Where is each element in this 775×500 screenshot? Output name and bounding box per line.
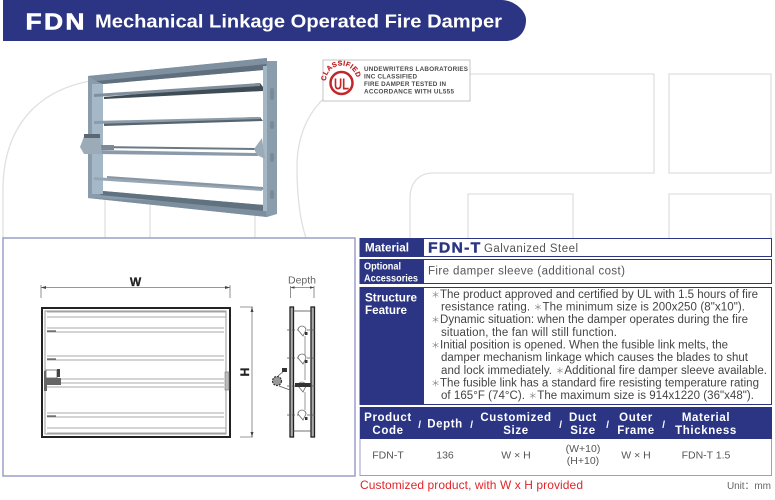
structure label bbox=[365, 292, 417, 317]
icon: UL classified logo bbox=[321, 60, 360, 96]
feature list: of 165°F (74°C). ＊The maximum size is 914x1220 (36"x48"). bbox=[441, 390, 754, 402]
accessories text: Fire damper sleeve (additional cost) bbox=[428, 266, 625, 278]
unit note: Unit：mm bbox=[727, 481, 771, 492]
feature list: ＊The product approved and certified by UL with 1.5 hours of fire bbox=[431, 289, 758, 301]
front view drawing bbox=[42, 308, 230, 437]
panel: optional accessories row bbox=[360, 260, 772, 284]
table header: / bbox=[606, 420, 610, 431]
H dimension bbox=[238, 307, 254, 437]
accessories label: Optional bbox=[364, 262, 401, 272]
table header: Size bbox=[503, 425, 529, 437]
material label: Material bbox=[365, 240, 409, 254]
table data row: FDN-T bbox=[372, 450, 404, 462]
feature list: resistance rating. ＊The minimum size is 200x250 (8"x10"). bbox=[441, 302, 745, 314]
left mechanism bbox=[44, 369, 61, 391]
table header: Product bbox=[364, 412, 412, 424]
panel: technical drawings bbox=[3, 238, 355, 476]
table data row: (H+10) bbox=[567, 455, 599, 467]
table header: / bbox=[470, 420, 474, 431]
table header: Material bbox=[682, 412, 730, 424]
UL text block: FIRE DAMPER TESTED IN bbox=[364, 81, 446, 88]
table data row: FDN-T 1.5 bbox=[682, 450, 731, 462]
table data row: (W+10) bbox=[566, 443, 600, 455]
product code heading: FDN bbox=[26, 10, 87, 35]
UL text block bbox=[364, 66, 468, 96]
table header bbox=[364, 412, 737, 437]
W dimension bbox=[41, 275, 230, 298]
depth label and dimension bbox=[288, 274, 316, 298]
customized product note: Customized product, with W x H provided bbox=[360, 478, 583, 492]
accessories label: Accessories bbox=[364, 274, 418, 284]
UL text block: UNDEWRITERS LABORATORIES bbox=[364, 66, 468, 73]
material value: Galvanized Steel bbox=[484, 243, 578, 255]
material value bbox=[428, 240, 578, 256]
table data row: W × H bbox=[621, 450, 651, 462]
table header: / bbox=[662, 420, 666, 431]
panel: material row bbox=[360, 238, 772, 256]
blades bbox=[94, 83, 263, 191]
H dimension: H bbox=[238, 368, 252, 376]
table header: Code bbox=[372, 425, 404, 437]
UL text block: INC CLASSIFIED bbox=[364, 74, 417, 80]
table header: Outer bbox=[619, 412, 653, 424]
table header: / bbox=[418, 420, 422, 431]
table data row bbox=[372, 443, 731, 467]
structure label: Feature bbox=[365, 305, 407, 317]
feature list: ＊The fusible link has a standard fire resisting temperature rating bbox=[431, 378, 759, 390]
panel: structure feature row bbox=[360, 288, 772, 404]
table data row: W × H bbox=[501, 450, 531, 462]
title text: Mechanical Linkage Operated Fire Damper bbox=[95, 10, 502, 32]
icon: UL classified logo: CLASSIFIED bbox=[321, 60, 360, 80]
side mechanism bbox=[272, 368, 290, 390]
feature list: situation, the fan will still function. bbox=[441, 327, 617, 339]
linkage bars bbox=[92, 145, 258, 156]
table header: Depth bbox=[427, 418, 463, 430]
table header: Customized bbox=[480, 412, 552, 424]
feature list: ＊Initial position is opened. When the fusible link melts, the bbox=[431, 340, 728, 352]
left bracket bbox=[80, 134, 102, 154]
feature list: ＊Dynamic situation: when the damper operates during the fire bbox=[431, 314, 748, 326]
material value: FDN-T bbox=[428, 240, 481, 256]
table header: Thickness bbox=[675, 425, 737, 437]
table header: Duct bbox=[569, 412, 597, 424]
depth label and dimension: Depth bbox=[288, 274, 316, 286]
illustration: 3D fire damper bbox=[80, 58, 277, 217]
panel: specification table bbox=[360, 407, 772, 476]
table header: Size bbox=[570, 425, 596, 437]
table header: / bbox=[559, 420, 563, 431]
table header: Frame bbox=[617, 425, 655, 437]
right bracket bbox=[254, 138, 265, 159]
side view drawing bbox=[272, 307, 317, 437]
structure label: Structure bbox=[365, 292, 417, 304]
feature list bbox=[431, 289, 767, 402]
UL text block: ACCORDANCE WITH UL555 bbox=[364, 88, 454, 96]
feature list: and lock immediately. ＊Additional fire damper sleeve available. bbox=[441, 365, 767, 377]
feature list: damper mechanism linkage which causes the blades to shut bbox=[441, 352, 749, 364]
icon: UL classified logo: UL bbox=[334, 76, 349, 94]
UL certification badge bbox=[321, 60, 470, 102]
title banner bbox=[3, 0, 526, 41]
table data row: 136 bbox=[436, 450, 454, 462]
accessories label bbox=[364, 262, 418, 284]
W dimension: W bbox=[130, 275, 142, 289]
